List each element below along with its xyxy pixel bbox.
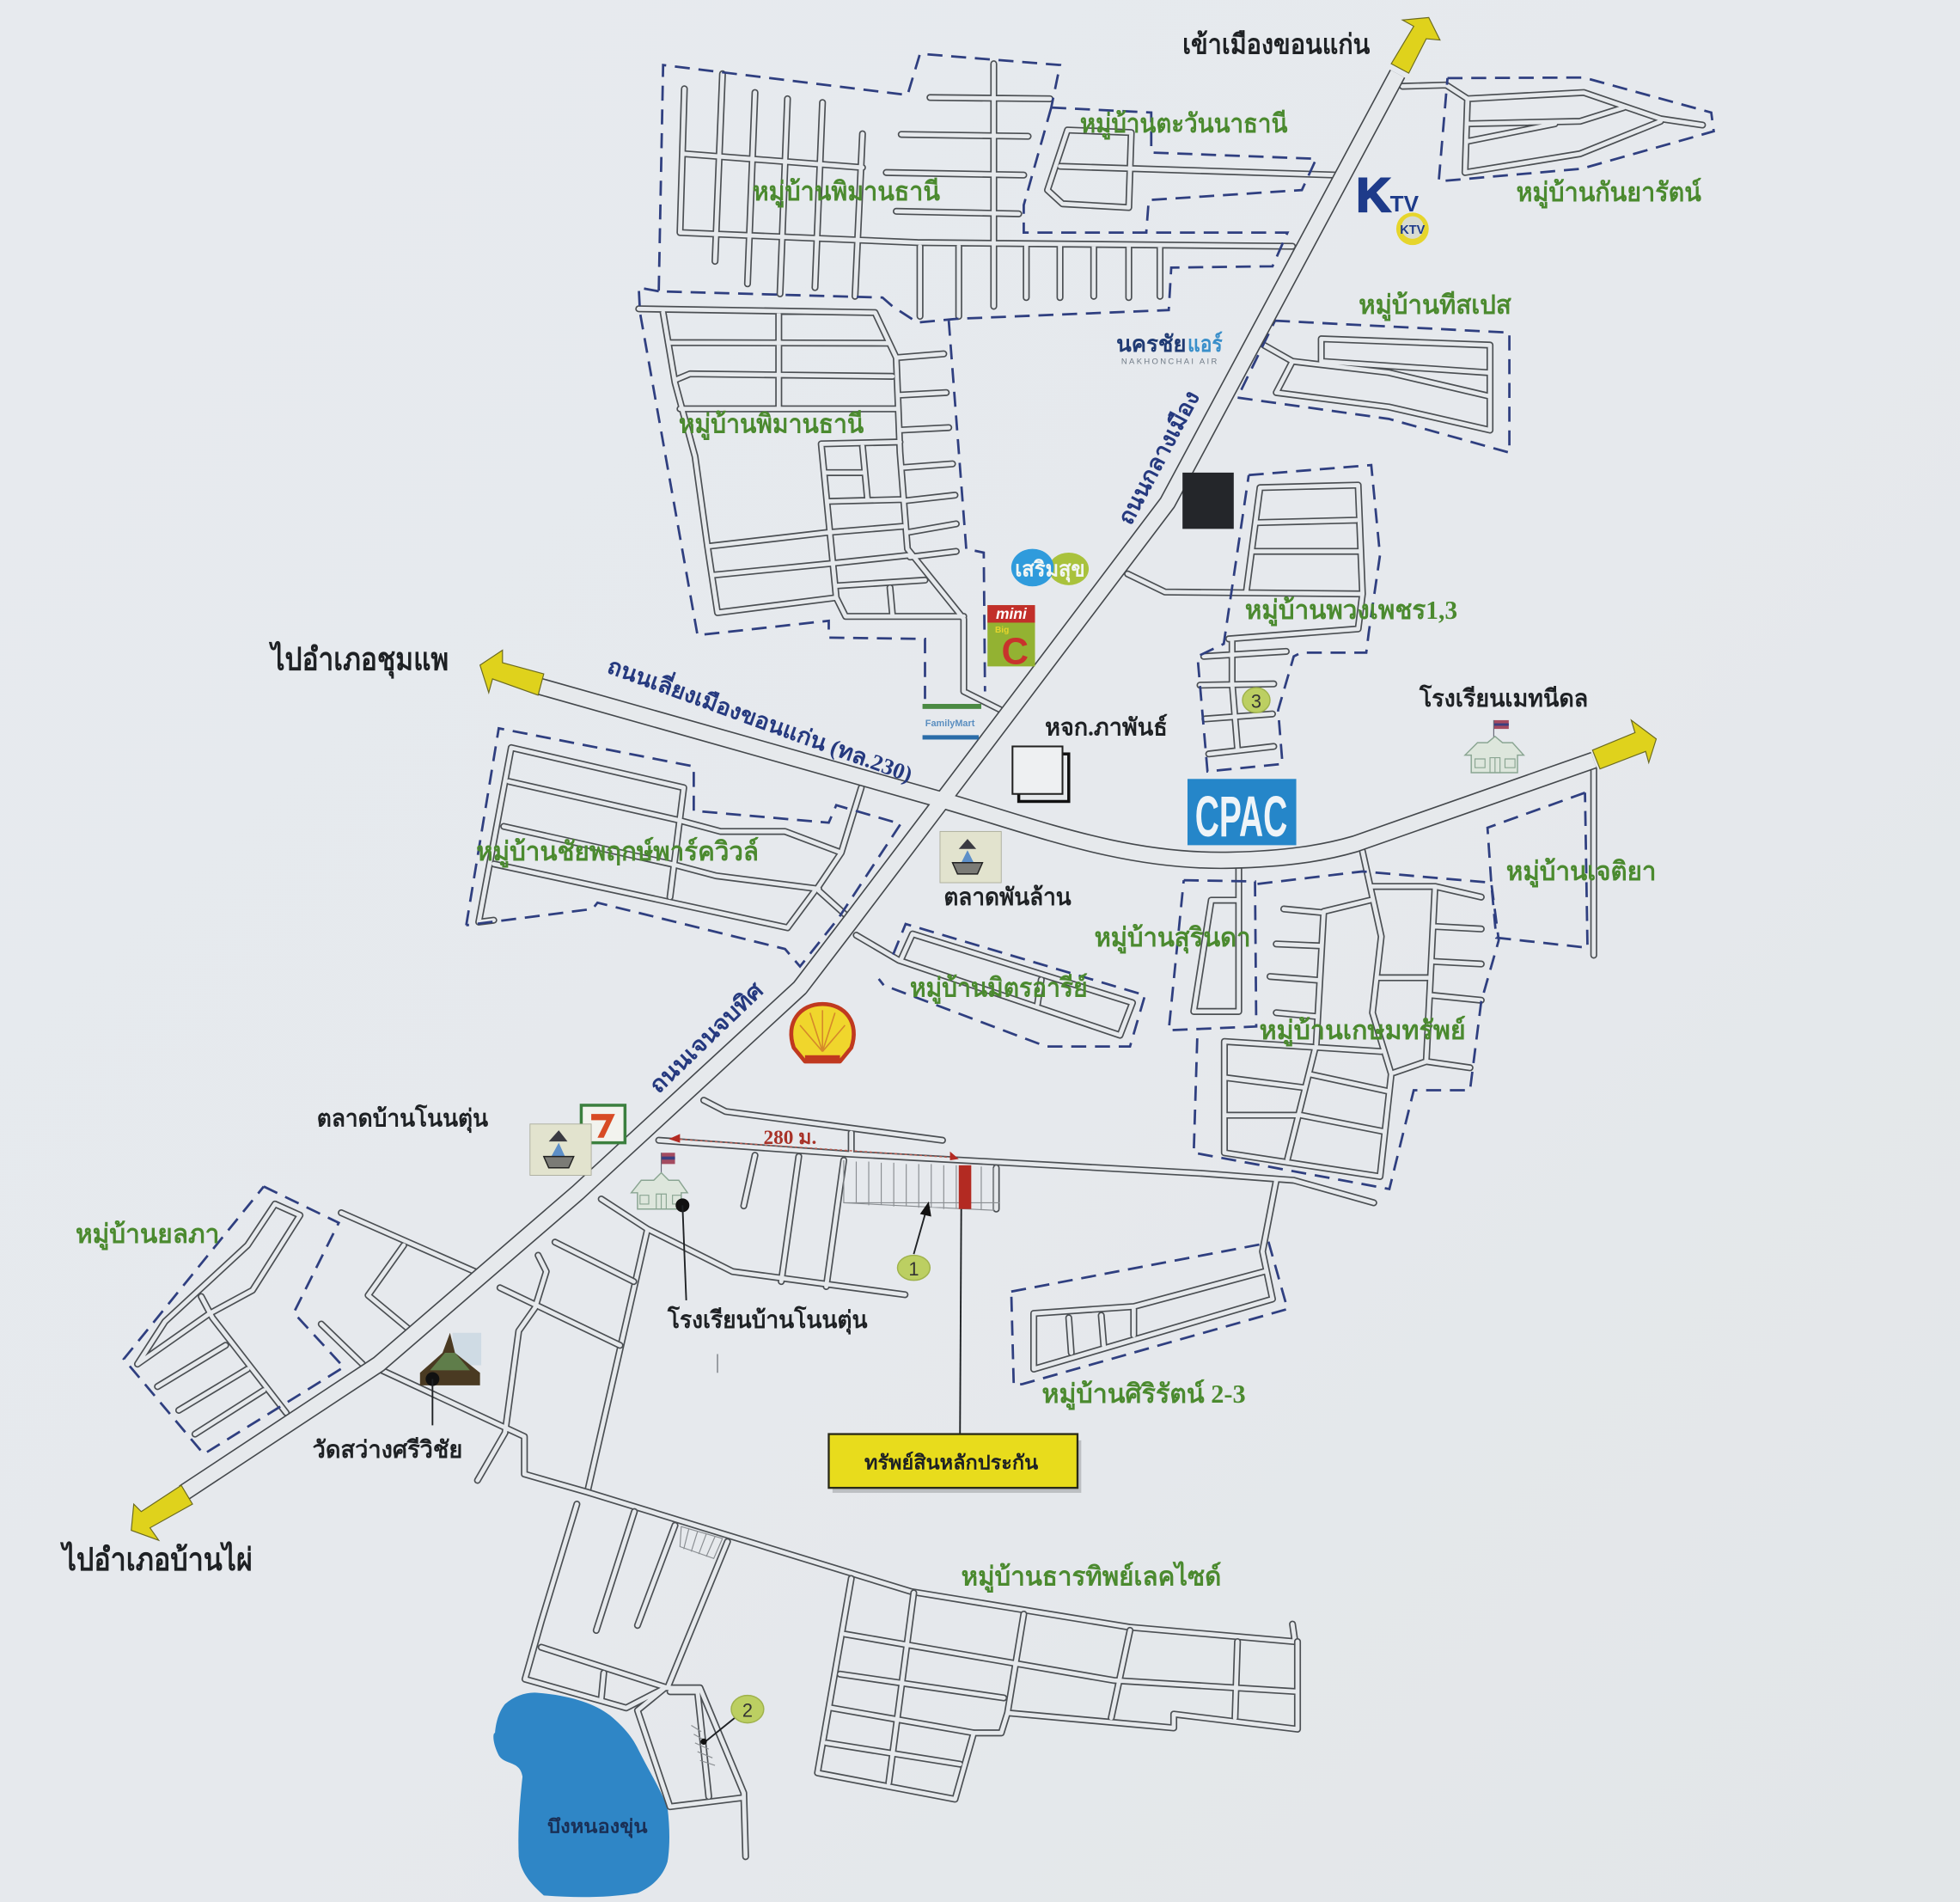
roads near the lake xyxy=(525,1504,746,1856)
market icon and label: ตลาดบ้านโนนตุ่น xyxy=(317,1104,591,1175)
village: หมู่บ้านธารทิพย์เลคไซด์ xyxy=(817,1562,1298,1799)
logo: mini Big C: Big xyxy=(995,626,1009,635)
label: หมู่บ้านศิริรัตน์ 2-3: หมู่บ้านศิริรัตน์ 2-3 xyxy=(1042,1379,1246,1410)
temple: วัดสว่างศรีวิชัย xyxy=(313,1333,481,1463)
village: หมู่บ้านเกษมทรัพย์ xyxy=(1194,852,1499,1189)
main roads xyxy=(184,74,1594,1493)
marker: 2 with arrow: 2 xyxy=(742,1699,753,1721)
logo: นครชัยแอร์: NAKHONCHAI AIR xyxy=(1121,357,1218,366)
school: โรงเรียนเมทนีดล: โรงเรียนเมทนีดล xyxy=(1419,683,1588,712)
lake: บึงหนองขุ่น: บึงหนองขุ่น xyxy=(547,1817,648,1839)
marker: 3: 3 xyxy=(1251,690,1261,712)
market icon and label: ตลาดพันล้าน xyxy=(940,831,1072,910)
logo: CPAC: CPAC xyxy=(1195,785,1287,849)
arrow: to Khon Kaen city xyxy=(1391,17,1440,73)
logo: FamilyMart xyxy=(923,704,981,739)
logo: นครชัยแอร์: แอร์ xyxy=(1188,331,1223,357)
label: หมู่บ้านชัยพฤกษ์พาร์ควิวล์: หมู่บ้านชัยพฤกษ์พาร์ควิวล์ xyxy=(476,836,759,868)
logo: mini Big C: mini xyxy=(996,605,1028,622)
lake: บึงหนองขุ่น xyxy=(493,1692,669,1897)
marker: 1 with arrow: 1 xyxy=(908,1258,919,1280)
village: หมู่บ้านเจติยา xyxy=(1487,769,1657,955)
logo: KTV: K xyxy=(1356,168,1390,222)
village: หมู่บ้านกันยารัตน์ xyxy=(1402,77,1713,209)
school: โรงเรียนเมทนีดล xyxy=(1419,683,1588,773)
arrow: to Ban Phai xyxy=(131,1485,192,1540)
direction label: ไปอำเภอชุมแพ: ไปอำเภอชุมแพ xyxy=(268,641,449,680)
road name: ถนนกลางเมือง: ถนนกลางเมือง xyxy=(1114,387,1205,529)
logo: นครชัยแอร์ xyxy=(1116,331,1223,366)
logo: KTV: KTV xyxy=(1400,223,1426,237)
school: โรงเรียนบ้านโนนตุ่น: โรงเรียนบ้านโนนตุ่น xyxy=(667,1305,868,1335)
village: หมู่บ้านพิมานธานี (north) xyxy=(659,54,1292,322)
school: โรงเรียนบ้านโนนตุ่น xyxy=(632,1153,868,1335)
logo: FamilyMart: FamilyMart xyxy=(925,719,975,729)
label: หมู่บ้านตะวันนาธานี: หมู่บ้านตะวันนาธานี xyxy=(1080,109,1287,140)
logo: mini Big C: C xyxy=(1001,630,1029,672)
arrow: to Chum Phae xyxy=(480,650,544,695)
label: หมู่บ้านเจติยา: หมู่บ้านเจติยา xyxy=(1506,857,1657,888)
callout: ทรัพย์สินหลักประกัน xyxy=(828,1209,1081,1493)
village: หมู่บ้านสุรินดา xyxy=(1095,869,1256,1031)
label: หมู่บ้านเกษมทรัพย์: หมู่บ้านเกษมทรัพย์ xyxy=(1260,1015,1466,1047)
marker: 1 with arrow xyxy=(897,1202,931,1281)
logo: เสริมสุข: เสริมสุข xyxy=(1015,559,1085,584)
village: หมู่บ้านมิตรอารีย์ xyxy=(856,924,1145,1047)
logo: นครชัยแอร์: นครชัย xyxy=(1116,331,1187,357)
marker: 2 with arrow xyxy=(700,1696,764,1745)
logo: เสริมสุข xyxy=(1011,549,1089,586)
arrow: east xyxy=(1592,720,1657,769)
distance marker: 280 ม. xyxy=(669,1127,959,1160)
distance marker: 280 ม.: 280 ม. xyxy=(763,1127,816,1149)
callout: ทรัพย์สินหลักประกัน: ทรัพย์สินหลักประกัน xyxy=(864,1451,1038,1474)
label and icon: หจก.ภาพันธ์ xyxy=(1012,713,1168,801)
direction label: ไปอำเภอบ้านไผ่: ไปอำเภอบ้านไผ่ xyxy=(59,1541,253,1577)
village: หมู่บ้านยลภา xyxy=(76,1187,344,1454)
direction label: เข้าเมืองขอนแก่น: เข้าเมืองขอนแก่น xyxy=(1182,29,1370,60)
local roads around the property and หมู่บ้านศิริรัตน์ 2-3 xyxy=(588,1100,1374,1491)
logo: KTV xyxy=(1356,168,1429,245)
village: หมู่บ้านพวงเพชร 1,3 xyxy=(1127,465,1457,772)
label: หมู่บ้านธารทิพย์เลคไซด์: หมู่บ้านธารทิพย์เลคไซด์ xyxy=(962,1562,1221,1593)
village: หมู่บ้านชัยพฤกษ์พาร์ควิวล์ xyxy=(467,728,901,967)
label: หมู่บ้านกันยารัตน์: หมู่บ้านกันยารัตน์ xyxy=(1517,177,1701,209)
property lots and red plot xyxy=(844,1160,1000,1210)
label: หมู่บ้านพิมานธานี: หมู่บ้านพิมานธานี xyxy=(679,409,864,440)
logo: 7-Eleven xyxy=(581,1105,625,1143)
black square building xyxy=(1182,473,1234,529)
temple: วัดสว่างศรีวิชัย: วัดสว่างศรีวิชัย xyxy=(313,1436,462,1463)
market icon and label: ตลาดพันล้าน: ตลาดพันล้าน xyxy=(943,884,1072,910)
logo: KTV: TV xyxy=(1390,191,1420,217)
village: หมู่บ้านตะวันนาธานี xyxy=(1047,107,1336,233)
label: หมู่บ้านพิมานธานี: หมู่บ้านพิมานธานี xyxy=(753,177,940,208)
village: หมู่บ้านพิมานธานี (south) xyxy=(638,288,1004,712)
road name: ถนนเจนจบทิศ: ถนนเจนจบทิศ xyxy=(644,977,768,1098)
road name: ถนนเลี่ยงเมืองขอนแก่น (ทล.230): ถนนเลี่ยงเมืองขอนแก่น (ทล.230) xyxy=(604,650,917,787)
label: หมู่บ้านยลภา: หมู่บ้านยลภา xyxy=(76,1220,219,1251)
label: หมู่บ้านสุรินดา: หมู่บ้านสุรินดา xyxy=(1095,923,1250,954)
logo: Shell xyxy=(791,1004,854,1061)
label: หมู่บ้านทีสเปส: หมู่บ้านทีสเปส xyxy=(1359,290,1511,321)
village: หมู่บ้านทีสเปส xyxy=(1237,290,1511,453)
label: หมู่บ้านพวงเพชร1,3: หมู่บ้านพวงเพชร1,3 xyxy=(1245,596,1457,627)
label and icon: หจก.ภาพันธ์: หจก.ภาพันธ์ xyxy=(1045,713,1168,740)
southern local roads xyxy=(321,1213,1295,1642)
logo: mini Big C xyxy=(987,605,1035,672)
market icon and label: ตลาดบ้านโนนตุ่น: ตลาดบ้านโนนตุ่น xyxy=(317,1104,488,1134)
marker: 3 xyxy=(1243,688,1270,712)
label: หมู่บ้านมิตรอารีย์: หมู่บ้านมิตรอารีย์ xyxy=(910,972,1088,1004)
logo: CPAC xyxy=(1188,779,1297,849)
